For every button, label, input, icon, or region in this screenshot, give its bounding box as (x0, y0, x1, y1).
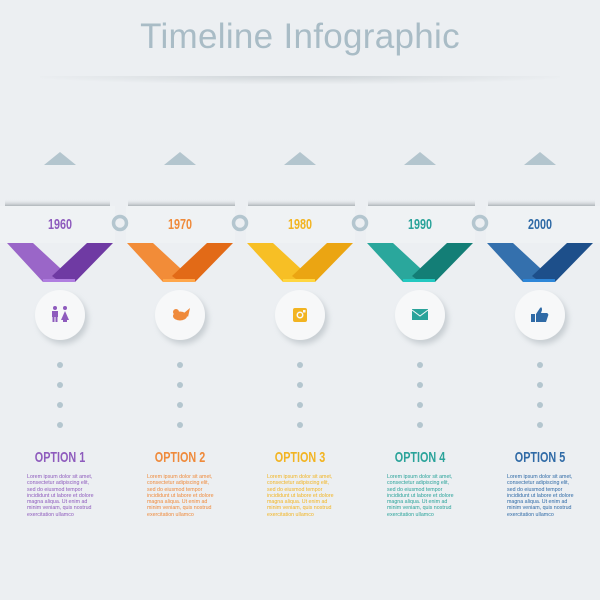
icon: people (52, 306, 69, 322)
years: 1970 (168, 215, 192, 232)
years: 1990 (408, 215, 432, 232)
years: 1960 (48, 215, 72, 232)
option 5 title: OPTION 5 (515, 449, 565, 466)
icon: bird (173, 308, 190, 320)
option 1 title: OPTION 1 (35, 449, 85, 466)
option 5 text: Lorem ipsum dolor sit amet, consectetur adipiscing elit, sed do eiusmod tempor incididunt ut labore et dolore magna aliqua. Ut enim ad minim veniam, quis nostrud exercitation ullamco (507, 474, 574, 518)
years: 1980 (288, 215, 312, 232)
icon circles (35, 290, 565, 340)
ribbons (7, 243, 593, 282)
option 1 text: Lorem ipsum dolor sit amet, consectetur adipiscing elit, sed do eiusmod tempor incididunt ut labore et dolore magna aliqua. Ut enim ad minim veniam, quis nostrud exercitation ullamco (27, 474, 94, 518)
years (48, 215, 552, 232)
band shadow (5, 199, 595, 206)
title: Timeline Infographic (140, 17, 460, 56)
ring markers (114, 216, 486, 230)
dots (57, 362, 543, 428)
icon: thumbs up (531, 307, 548, 322)
timeline band (0, 206, 600, 243)
title shadow bar (40, 76, 560, 84)
option 4 title: OPTION 4 (395, 449, 445, 466)
icon: camera (293, 308, 307, 322)
option 3 text: Lorem ipsum dolor sit amet, consectetur adipiscing elit, sed do eiusmod tempor incididunt ut labore et dolore magna aliqua. Ut enim ad minim veniam, quis nostrud exercitation ullamco (267, 474, 334, 518)
option 2 text: Lorem ipsum dolor sit amet, consectetur adipiscing elit, sed do eiusmod tempor incididunt ut labore et dolore magna aliqua. Ut enim ad minim veniam, quis nostrud exercitation ullamco (147, 474, 214, 518)
option 4 text: Lorem ipsum dolor sit amet, consectetur adipiscing elit, sed do eiusmod tempor incididunt ut labore et dolore magna aliqua. Ut enim ad minim veniam, quis nostrud exercitation ullamco (387, 474, 454, 518)
triangles (44, 152, 556, 165)
years: 2000 (528, 215, 552, 232)
option 2 title: OPTION 2 (155, 449, 205, 466)
icon: envelope (412, 309, 428, 320)
option 3 title: OPTION 3 (275, 449, 325, 466)
